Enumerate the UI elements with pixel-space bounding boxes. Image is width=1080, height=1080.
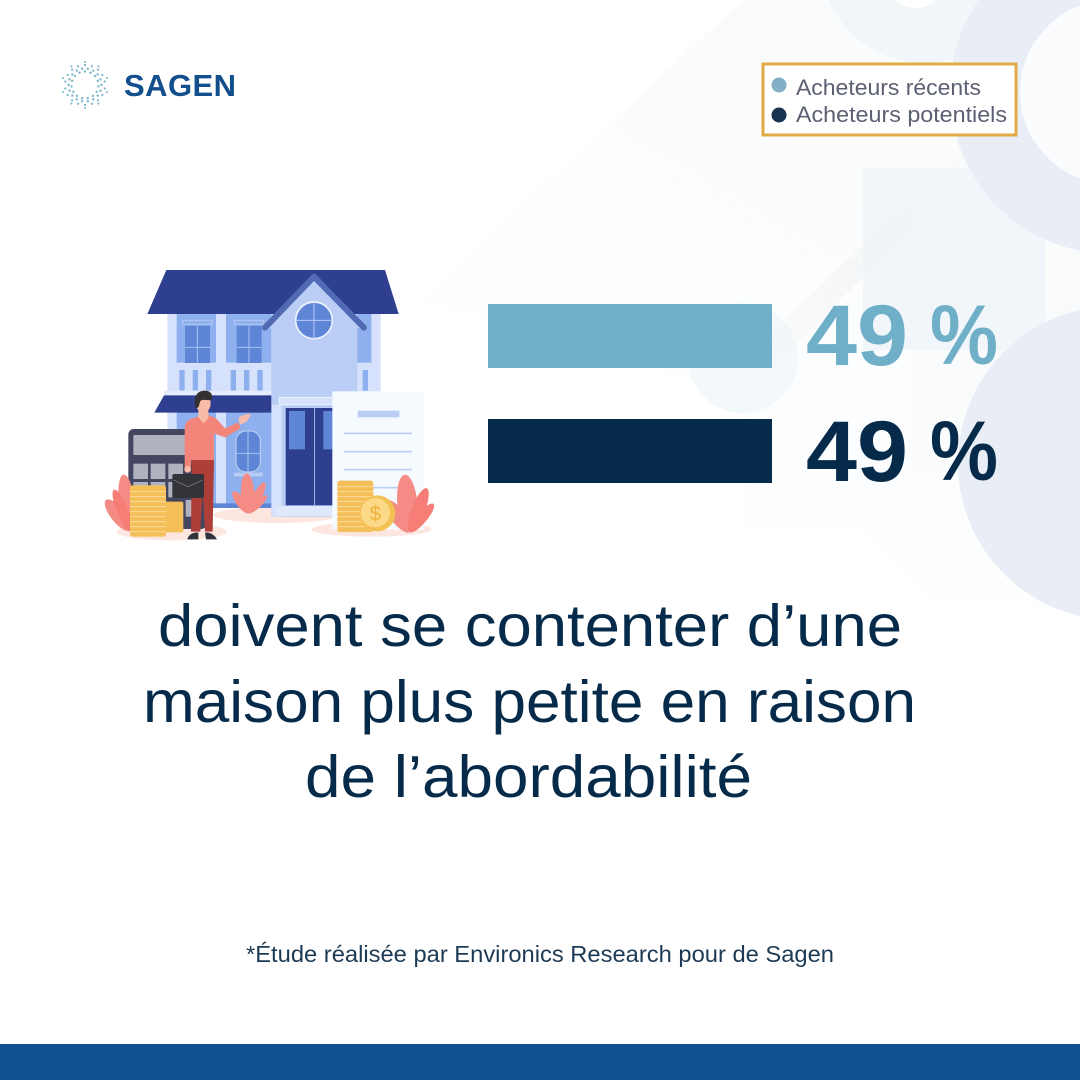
logo: Sagen	[62, 61, 236, 109]
bar: potential buyers 49%: 49	[806, 404, 908, 500]
coins: right stack with dollar coin: $	[370, 503, 382, 526]
bar: potential buyers 49%: %	[930, 404, 998, 498]
bar: recent buyers 49%: 49	[806, 288, 908, 384]
ground shadows	[117, 507, 432, 540]
plants	[100, 473, 438, 536]
bar chart	[488, 288, 998, 500]
bar: recent buyers 49%: %	[930, 288, 998, 382]
legend item: potential buyers: Acheteurs potentiels	[796, 102, 1007, 127]
calculator	[128, 429, 207, 529]
main statement	[143, 593, 916, 810]
front door	[272, 397, 339, 516]
background decoration	[420, 0, 1080, 630]
legend item: recent buyers: Acheteurs récents	[796, 75, 981, 100]
coins: left stack	[130, 485, 183, 537]
roof	[147, 270, 399, 413]
document	[332, 391, 424, 530]
house	[164, 310, 381, 517]
source footnote: *Étude réalisée par Environics Research pour de Sagen	[246, 941, 834, 967]
logo wordmark: SAGEN	[124, 68, 236, 103]
logo dot ring	[62, 61, 108, 109]
main statement: maison plus petite en raison	[143, 669, 916, 735]
coins: right stack with dollar coin	[337, 481, 395, 532]
bottom band	[0, 1044, 1080, 1080]
legend box	[763, 64, 1016, 135]
legend	[763, 64, 1016, 135]
person with briefcase	[172, 391, 251, 539]
illustration: house, agent, calculator, coins	[100, 270, 438, 540]
bar: potential buyers 49%	[488, 404, 998, 500]
main statement: de l’abordabilité	[305, 744, 752, 810]
main statement: doivent se contenter d’une	[158, 593, 902, 659]
bar: recent buyers 49%	[488, 288, 998, 384]
